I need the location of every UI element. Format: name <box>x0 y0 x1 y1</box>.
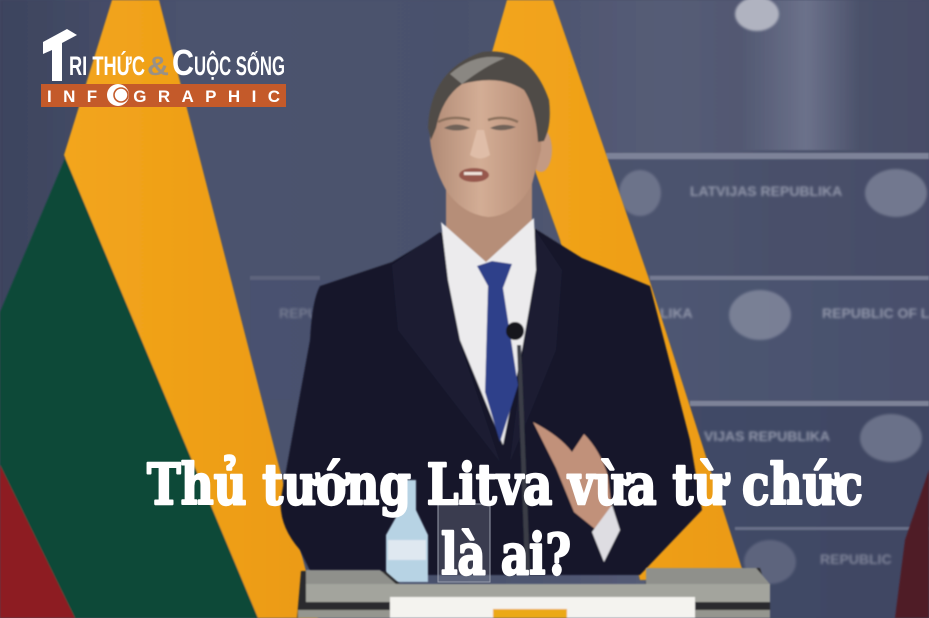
eyes <box>444 124 516 130</box>
mouth <box>459 168 489 182</box>
shirt cuff <box>592 505 620 562</box>
far-right dark red flag edge <box>895 470 929 618</box>
head <box>430 60 542 217</box>
shirt <box>441 218 536 445</box>
title <box>147 452 863 588</box>
title: là ai? <box>441 522 571 588</box>
left flag of Lithuania <box>0 0 318 618</box>
logo wordmark: & <box>147 51 169 81</box>
backdrop emblems and wording <box>279 0 929 584</box>
neck <box>446 180 532 270</box>
microphone <box>517 345 530 570</box>
lectern <box>297 568 770 618</box>
backdrop emblems and wording: REPUBLIC <box>820 551 892 567</box>
logo wordmark <box>69 42 285 83</box>
ear <box>530 128 552 172</box>
hair <box>428 51 550 142</box>
hand <box>533 422 612 533</box>
backdrop emblems and wording: REPU <box>279 305 318 321</box>
nose <box>470 130 490 158</box>
logo wordmark: RI THỨC <box>69 50 145 81</box>
backdrop emblems and wording: LIKA <box>660 305 693 321</box>
water bottle <box>386 480 428 582</box>
brows <box>438 118 518 122</box>
backdrop emblems and wording: VIJAS REPUBLIKA <box>704 428 830 444</box>
backdrop emblems and wording: LATVIJAS REPUBLIKA <box>690 183 842 199</box>
logo infographic band <box>41 84 286 107</box>
logo T mark <box>43 29 77 81</box>
right flag of Lithuania <box>492 0 745 580</box>
water glass <box>438 504 490 582</box>
lapel shading <box>392 228 562 462</box>
logo: Tri Thuc & Cuoc Song Infographic <box>41 29 286 107</box>
logo: Tri Thuc & Cuoc Song Infographic: INFOGRAPHIC <box>47 87 280 106</box>
speaker <box>281 51 702 575</box>
tie <box>477 261 518 442</box>
logo wordmark: C <box>172 42 194 83</box>
logo wordmark: UỘC SỐNG <box>194 49 285 81</box>
jacket <box>281 228 702 575</box>
